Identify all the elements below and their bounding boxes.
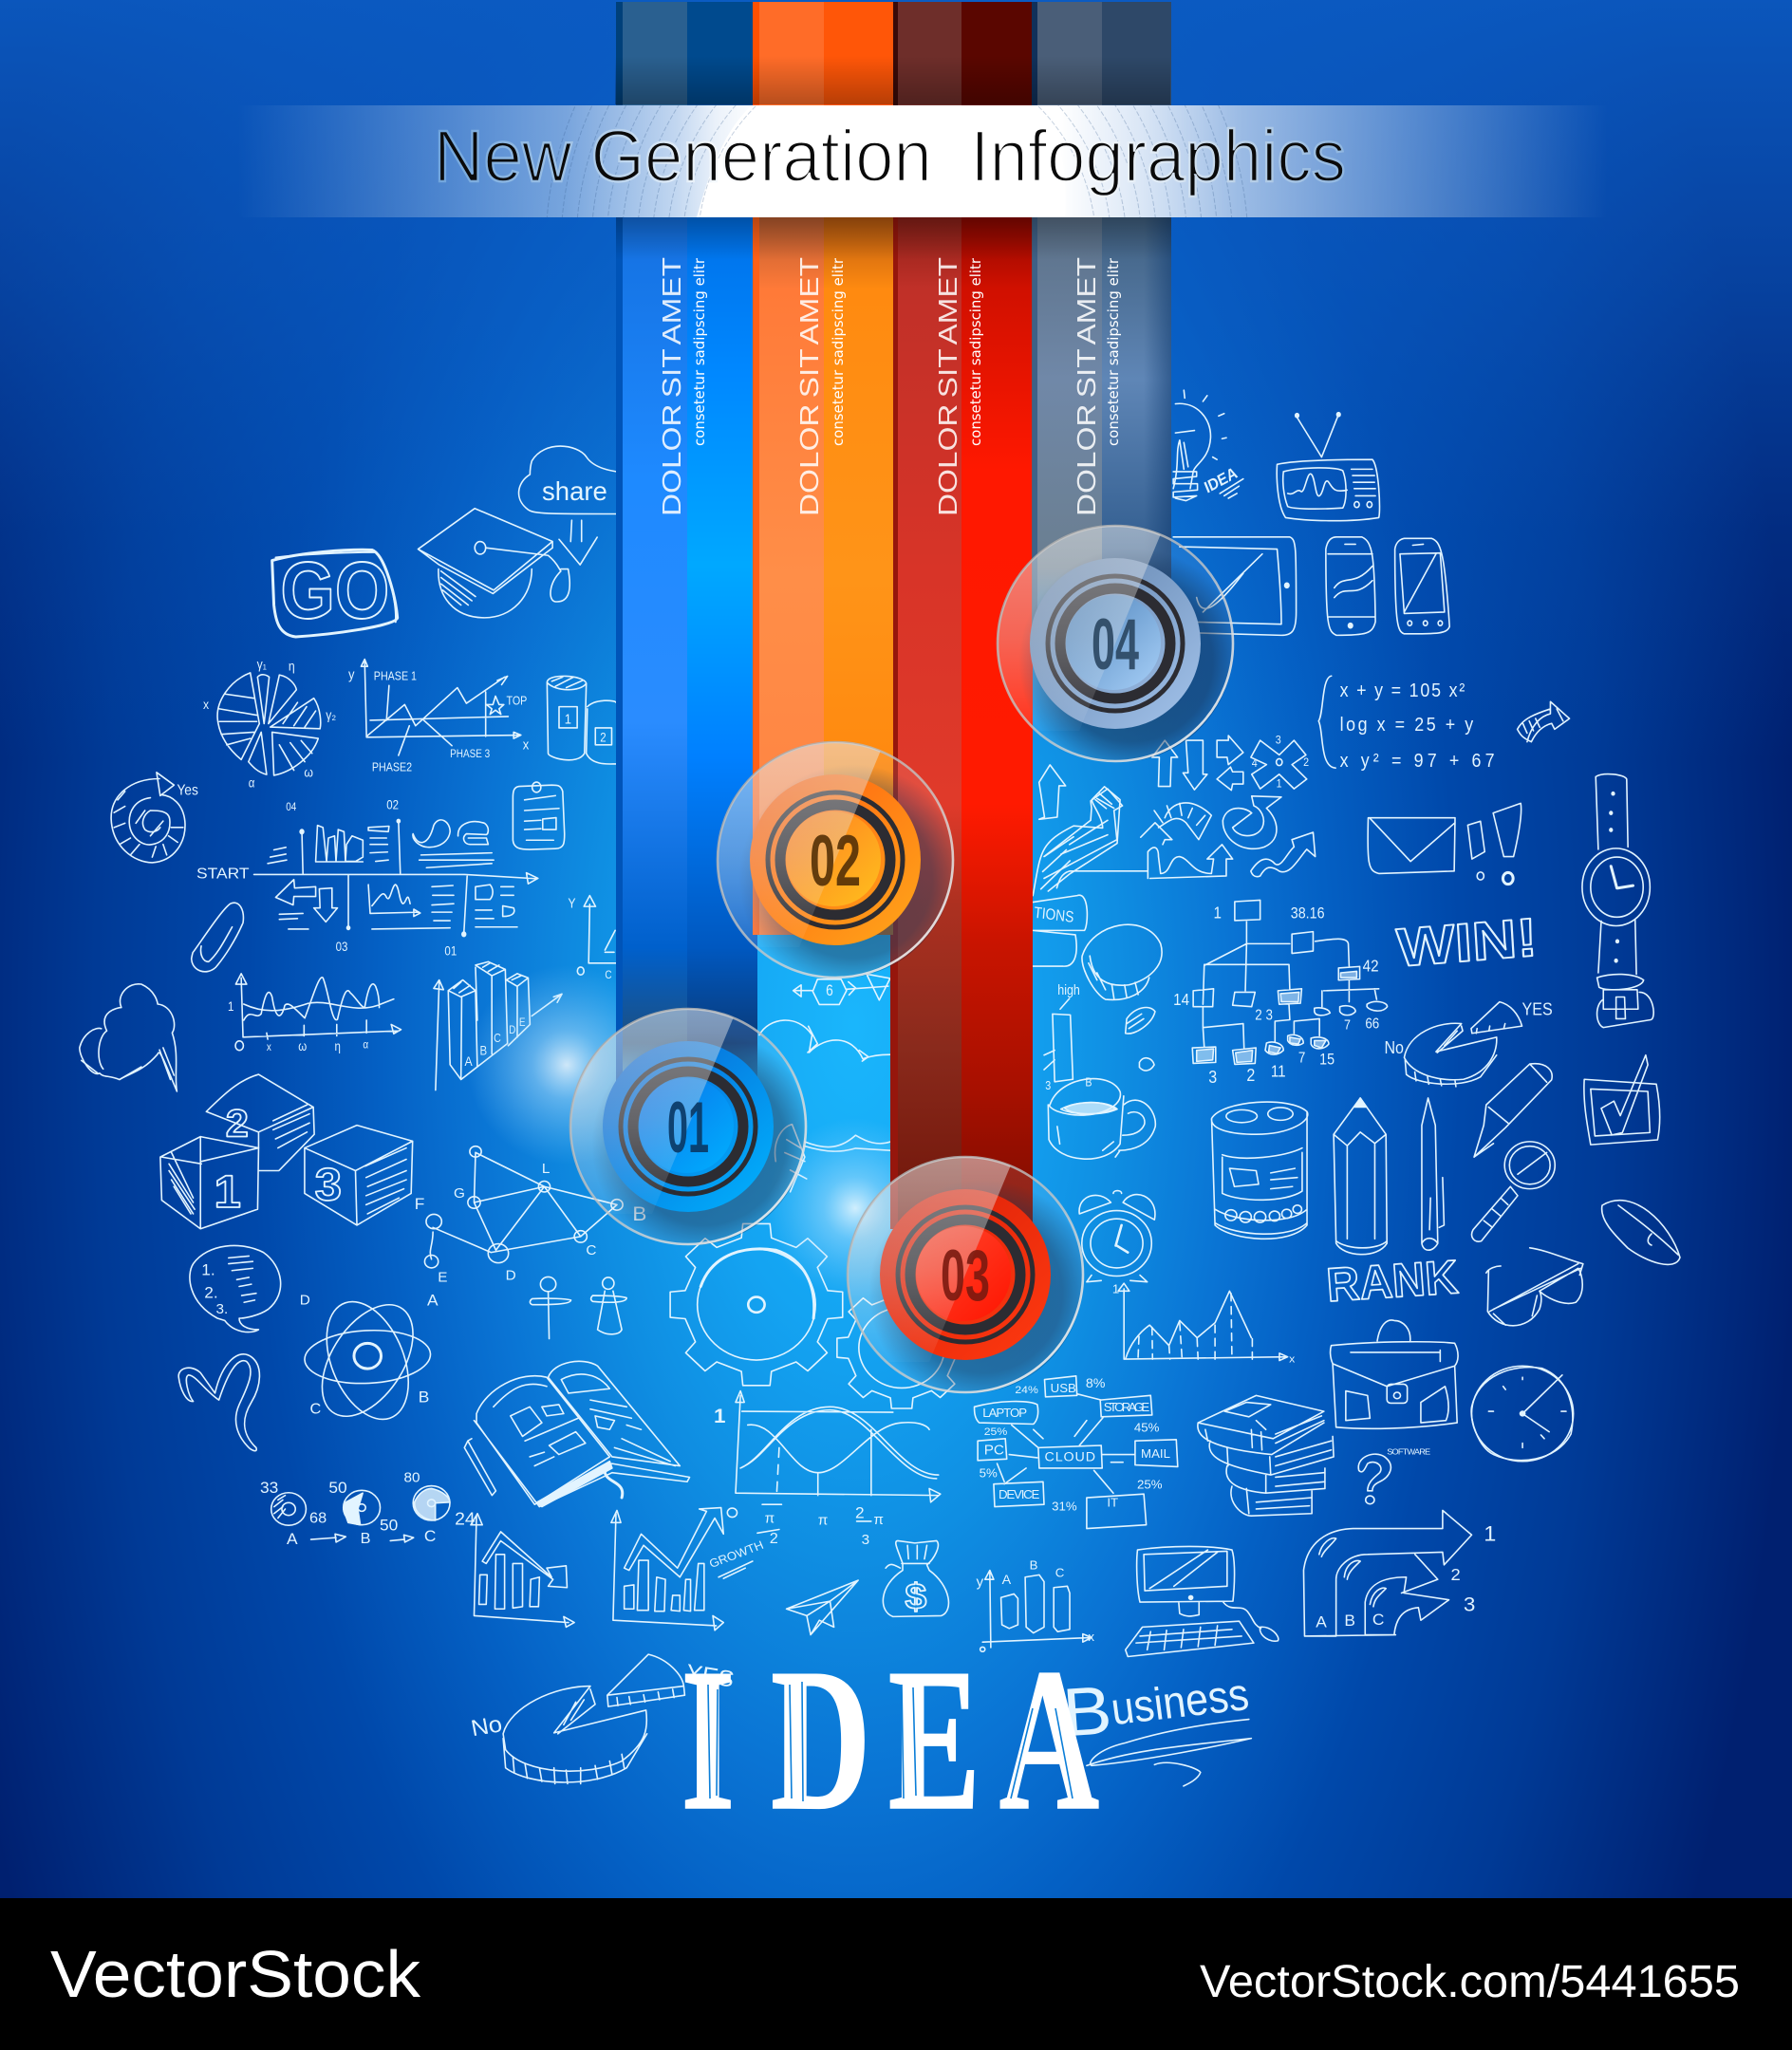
icon: wrist watch [1582, 774, 1653, 1028]
chart: rising bars with growth: GROWTH [707, 1538, 766, 1571]
icon: cup: B [1085, 1075, 1092, 1090]
label: column 4: DOLOR SIT AMET [1072, 257, 1101, 516]
icon: hexagon chain [793, 974, 890, 1004]
chart: cloud network map: 31% [1052, 1500, 1077, 1513]
label: column 3: consetetur sadipscing elitr [967, 257, 984, 446]
chart: cloud network map [975, 1376, 1178, 1529]
icon: donut row: 50 [380, 1517, 398, 1534]
icon: three nested arrows: 2 [1451, 1566, 1461, 1584]
icon: question mark: SOFTWARE [1387, 1447, 1430, 1456]
icon: arrows set: 3 [1276, 735, 1281, 747]
icon: atom: D [300, 1294, 310, 1309]
text: Business: usiness [1108, 1668, 1252, 1735]
icon: exclamation marks [1467, 803, 1521, 885]
icon: open book [464, 1361, 690, 1507]
icon: share cloud [519, 446, 616, 565]
icon: big hook number [178, 1354, 259, 1451]
icon: envelope [1368, 818, 1455, 873]
chart: cloud network map: 24% [1015, 1383, 1038, 1396]
doodles: upper right cluster [1044, 390, 1660, 1145]
chart: org tree: 38.16 [1291, 905, 1325, 922]
doodles: centre right fragments [568, 765, 1155, 1192]
chart: phase line graph: x [523, 736, 529, 752]
button 04 [992, 520, 1233, 762]
chart: phase line graph: PHASE2 [372, 761, 412, 774]
icon: donut row [260, 1471, 476, 1548]
icon: donut row: B [361, 1531, 370, 1547]
icon: pie no yes: No [469, 1712, 504, 1742]
icon: bars and cup fragments: high [1057, 982, 1080, 997]
icon: axis fragment [568, 895, 616, 981]
icon: donut row: A [287, 1530, 298, 1548]
chart: network graph: D [506, 1269, 516, 1283]
icon: number cubes: 1 [215, 1166, 241, 1217]
column labels [657, 257, 1122, 516]
chart: org tree: 2 [1246, 1065, 1255, 1085]
chart: wave line graph: α [363, 1039, 368, 1052]
chart: cloud network map: USB [1051, 1381, 1076, 1395]
icon: check box [1584, 1055, 1660, 1145]
chart: rising bars with growth [611, 1504, 884, 1631]
chart: org tree: 42 [1363, 958, 1379, 976]
text: equations: log x = 25 + y [1340, 715, 1474, 736]
icon: arrows set [1152, 735, 1309, 791]
label: column 1 [657, 257, 708, 516]
icon: donut row: 24 [455, 1509, 476, 1529]
shadow band above banner [615, 56, 1170, 104]
column 4 grey [1032, 2, 1171, 655]
icon: paper plane [787, 1580, 858, 1635]
icon: tablet [1173, 537, 1297, 635]
text: Business [1060, 1668, 1252, 1786]
icon: spiral arrow: Yes [177, 782, 198, 799]
icon: three nested arrows: 3 [1464, 1593, 1475, 1615]
icon: atom: B [419, 1388, 429, 1406]
icon: hatched pie chart [203, 657, 336, 791]
button 03 [842, 1151, 1083, 1393]
label: column 2 [794, 257, 847, 516]
chart: phase line graph: PHASE 3 [450, 749, 490, 760]
chart: org tree: 11 [1271, 1063, 1286, 1081]
label: column 3 [933, 257, 984, 516]
chart: rising bars with growth: 3 [862, 1533, 869, 1548]
icon: solutions banner and arrows: TIONS [1034, 904, 1074, 926]
icon: mouse [1602, 1201, 1680, 1264]
icon: 3D bars ABCDE: B [480, 1044, 487, 1058]
chart: sine curves [714, 1391, 941, 1502]
footer url: VectorStock.com/5441655 [1200, 1957, 1740, 2007]
title text: New Generation Infographics [434, 116, 1346, 197]
doodles: far right mouse [1602, 1201, 1680, 1264]
chart: network graph: F [415, 1196, 424, 1213]
icon: cloud fragment [759, 1020, 890, 1192]
icon: magnifier [1472, 1142, 1555, 1241]
button 03: 03 [941, 1236, 990, 1316]
icon: donut row: 50 [328, 1480, 347, 1497]
icon: pie yes no right: YES [1522, 998, 1553, 1019]
chart: cloud network map: 8% [1086, 1376, 1106, 1390]
column 1 blue [616, 2, 757, 1087]
chart: network graph: G [454, 1187, 465, 1202]
chart: phase line graph: TOP [506, 695, 528, 708]
light glare right [765, 1118, 945, 1298]
chart: wave line graph: ω [298, 1039, 307, 1053]
chart: peaks graph [1112, 1282, 1295, 1365]
chart: network graph: A [427, 1292, 439, 1309]
chart: cloud network map: 45% [1134, 1421, 1159, 1435]
chart: org tree: 7 [1344, 1017, 1351, 1033]
icon: cylinders [547, 676, 616, 764]
icon: figures [530, 1277, 626, 1339]
footer brand: VectorStock [50, 1937, 421, 2011]
icon: phone plain [1395, 538, 1449, 634]
chart: peaks graph: x [1289, 1352, 1295, 1365]
footer bar [0, 1898, 1792, 2050]
icon: thought cloud [80, 984, 177, 1091]
icon: 3D bars ABCDE: D [509, 1025, 516, 1036]
icon: donut row: 33 [260, 1480, 278, 1497]
icon: atom [300, 1291, 432, 1430]
icon: share cloud: share [542, 477, 607, 506]
icon: glasses [1486, 1248, 1583, 1326]
icon: briefcase [1331, 1320, 1458, 1428]
chart: rising bars with growth: 2 [855, 1504, 865, 1521]
icon: three nested arrows [1303, 1510, 1496, 1636]
icon: speech bubble [190, 1245, 281, 1332]
icon: GO sign: GO [280, 545, 389, 635]
chart: three bars xy [977, 1558, 1095, 1651]
chart: org tree: 14 [1173, 991, 1189, 1009]
chart: rising bars with growth: 2 [770, 1531, 778, 1547]
icon: pie no yes: YES [683, 1660, 736, 1692]
chart: three bars xy: y [977, 1575, 984, 1590]
label: column 4 [1072, 257, 1122, 516]
text: equations: x y² = 97 + 67 [1340, 751, 1495, 772]
chart: start timeline: 01 [444, 944, 457, 959]
icon: 3D bars ABCDE: E [519, 1017, 526, 1029]
chart: wave line graph: 1 [228, 999, 233, 1014]
chart: falling bars [471, 1514, 574, 1627]
text: RANK: RANK [1325, 1251, 1461, 1313]
chart: three bars xy: B [1030, 1558, 1038, 1573]
icon: axis fragment: C [605, 969, 612, 981]
icon: pie yes no right [1384, 998, 1553, 1087]
icon: number cubes: 3 [315, 1160, 342, 1210]
icon: money bag [883, 1540, 948, 1617]
light glare left [467, 965, 666, 1165]
icon: tin can [1211, 1102, 1308, 1239]
icon: money bag: $ [905, 1576, 926, 1617]
text: equations [1318, 676, 1495, 772]
chart: start timeline: 04 [286, 801, 296, 813]
chart: cloud network map: LAPTOP [982, 1406, 1027, 1420]
chart: network graph: B [632, 1202, 646, 1225]
chart: org tree: 3 [1208, 1067, 1217, 1087]
icon: atom: C [310, 1402, 321, 1417]
icon: notepad [513, 782, 565, 849]
chart: cloud network map: PC [984, 1444, 1004, 1458]
icon: desktop computer [1126, 1546, 1279, 1656]
icon: arrows set: 1 [1277, 778, 1282, 791]
doodles: lower left cluster [160, 1074, 966, 1783]
icon: pencil diagonal [1474, 1064, 1552, 1157]
icon: gear small [837, 1287, 966, 1408]
icon: number cubes: 2 [226, 1102, 249, 1145]
icon: three nested arrows: C [1372, 1611, 1384, 1629]
icon: stack of books [1198, 1395, 1334, 1516]
icon: wall clock [1471, 1366, 1574, 1462]
icon: cylinders: 1 [565, 711, 571, 727]
icon: question mark [1358, 1447, 1430, 1504]
chart: start timeline: 03 [336, 940, 347, 954]
chart: start timeline: 02 [386, 798, 399, 812]
chart: phase line graph: y [348, 666, 355, 682]
icon: arrows set: 4 [1252, 758, 1258, 770]
chart: wave line graph: η [334, 1039, 341, 1053]
chart: peaks graph: 1 [1112, 1282, 1119, 1296]
icon: pie yes no right: No [1384, 1037, 1404, 1057]
title banner [262, 105, 1587, 217]
label: column 1: DOLOR SIT AMET [657, 257, 686, 516]
icon: 3D bars ABCDE: C [494, 1032, 501, 1045]
chart: three bars xy: x [1088, 1631, 1095, 1644]
column 2 orange [753, 2, 893, 935]
text: IDEA scribble: IDEA [681, 1626, 1099, 1853]
icon: phone chart [1326, 537, 1375, 635]
icon: speech bubble: 3. [216, 1303, 228, 1317]
icon: pen [1422, 1098, 1444, 1250]
chart: network graph [415, 1146, 646, 1309]
icon: snake arrows [1044, 789, 1316, 888]
chart: network graph: E [438, 1271, 448, 1286]
icon: donut row: 68 [309, 1511, 327, 1526]
text: WIN sign: WIN! [1395, 907, 1539, 978]
label: column 2: DOLOR SIT AMET [794, 257, 824, 516]
icon: hatched pie chart: γ₁ [257, 657, 267, 672]
icon: graduation cap [419, 509, 569, 618]
icon: three nested arrows: A [1316, 1613, 1328, 1631]
chart: rising bars with growth: π [818, 1514, 828, 1529]
chart: cloud network map: STORAGE [1104, 1400, 1150, 1414]
chart: wave line graph [228, 974, 401, 1053]
chart: wave line graph: x [267, 1041, 271, 1053]
icon: pie no yes [469, 1654, 736, 1783]
icon: arrows set: 2 [1303, 757, 1309, 769]
text: equations: x + y = 105 x² [1340, 680, 1465, 702]
label: column 2: consetetur sadipscing elitr [830, 257, 847, 446]
chart: cloud network map: IT [1107, 1496, 1118, 1509]
icon: three nested arrows: B [1344, 1612, 1355, 1630]
icon: 3D bars ABCDE: A [464, 1053, 473, 1069]
button 02 [712, 736, 953, 978]
icon: three nested arrows: 1 [1484, 1521, 1496, 1545]
icon: hexagon chain: 6 [826, 982, 833, 1000]
button 02: 02 [810, 821, 861, 902]
icon: 3D bars ABCDE [434, 961, 562, 1090]
icon: tv [1277, 413, 1379, 521]
chart: three bars xy: C [1055, 1566, 1064, 1580]
label: column 1: consetetur sadipscing elitr [691, 257, 708, 446]
icon: speech bubble: 1. [201, 1261, 215, 1278]
icon: light bulb [1173, 390, 1243, 501]
icon: donut row: 80 [404, 1471, 420, 1485]
icon: cup [1045, 1075, 1155, 1159]
icon: cup: 3 [1045, 1078, 1052, 1092]
chart: org tree: 66 [1365, 1016, 1379, 1033]
chart: rising bars with growth: π [765, 1512, 775, 1526]
chart: cloud network map: 25% [984, 1425, 1008, 1438]
icon: paperclip [192, 903, 243, 972]
icon: donut row: C [424, 1527, 436, 1545]
chart: cloud network map: 25% [1137, 1478, 1162, 1491]
text: Business: B [1060, 1671, 1114, 1751]
label: column 4: consetetur sadipscing elitr [1105, 257, 1122, 446]
chart: network graph: L [542, 1162, 550, 1177]
icon: alarm clock [1079, 1191, 1155, 1282]
column 3 red [890, 2, 1033, 1229]
doodles: upper left cluster [80, 446, 616, 1091]
icon: hatched pie chart: x [203, 697, 209, 712]
icon: hatched pie chart: η [289, 659, 295, 674]
icon: solutions banner and arrows [1033, 765, 1120, 966]
icon: speech bubble: 2. [204, 1284, 218, 1301]
icon: axis fragment: Y [568, 895, 576, 911]
icon: light bulb: IDEA [1202, 464, 1240, 497]
chart: cloud network map: MAIL [1141, 1446, 1170, 1461]
icon: spiral arrow [111, 773, 198, 863]
button 01 [565, 1003, 806, 1245]
doodles: lower right cluster [883, 1064, 1583, 1786]
chart: sine curves: 1 [714, 1405, 726, 1427]
button 04: 04 [1092, 605, 1139, 685]
chart: cloud network map: CLOUD [1045, 1449, 1095, 1464]
chart: phase line graph [348, 660, 529, 774]
icon: hatched pie chart: α [249, 776, 254, 791]
chart: cloud network map: 5% [980, 1466, 998, 1480]
icon: gear large [670, 1223, 843, 1386]
chart: phase line graph: PHASE 1 [374, 670, 417, 683]
chart: org tree: 7 [1298, 1051, 1305, 1067]
icon: number cubes [160, 1074, 413, 1229]
top glow [0, 0, 1792, 759]
icon: curved arrow [1518, 701, 1570, 742]
icon: cylinders: 2 [600, 731, 607, 745]
chart: org tree [1173, 900, 1388, 1087]
chart: org tree: 1 [1214, 904, 1222, 922]
icon: hatched pie chart: γ₂ [326, 707, 336, 722]
shadow band below banner [616, 217, 1171, 260]
chart: three bars xy: A [1002, 1572, 1012, 1587]
chart: network graph: C [586, 1243, 597, 1258]
chart: org tree: 2 3 [1255, 1008, 1273, 1024]
label: column 3: DOLOR SIT AMET [933, 257, 962, 516]
chart: start timeline [196, 798, 538, 959]
chart: org tree: 15 [1319, 1052, 1335, 1069]
chart: cloud network map: DEVICE [999, 1487, 1040, 1501]
chart: start timeline: START [196, 865, 250, 883]
icon: hatched pie chart: ω [304, 764, 313, 780]
button 01: 01 [667, 1088, 709, 1168]
icon: bars and cup fragments [1044, 924, 1162, 1082]
icon: pencil [1334, 1098, 1387, 1255]
chart: rising bars with growth: π [873, 1513, 884, 1528]
